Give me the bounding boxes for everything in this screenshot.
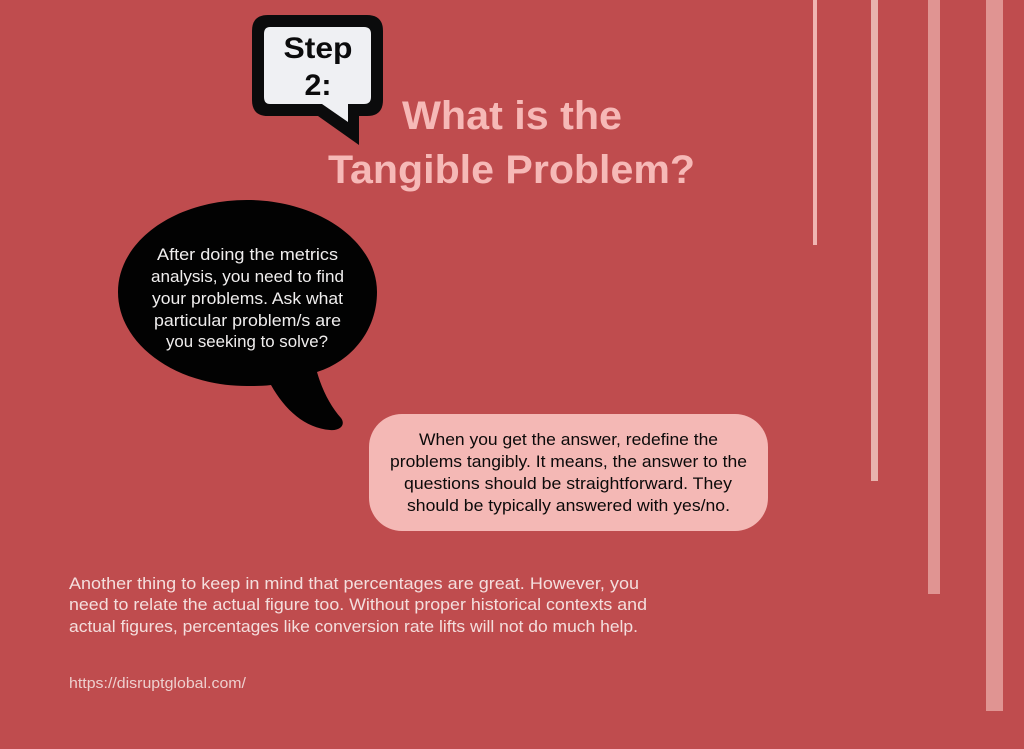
step label: Step <box>284 32 352 65</box>
bubble text: After doing the metrics <box>157 245 338 264</box>
icon: step speech bubble <box>252 15 383 145</box>
step label <box>284 32 352 102</box>
body paragraph: Another thing to keep in mind that percentages are great. However, you <box>69 574 639 593</box>
callout text: questions should be straightforward. They <box>404 474 733 493</box>
pink callout <box>369 414 768 531</box>
body paragraph <box>69 574 647 636</box>
body paragraph: actual figures, percentages like conversion rate lifts will not do much help. <box>69 617 638 636</box>
title: Tangible Problem? <box>328 148 695 192</box>
bubble text <box>151 245 344 351</box>
step label: 2: <box>304 69 332 102</box>
black speech bubble <box>118 200 377 430</box>
bubble text: your problems. Ask what <box>152 289 343 308</box>
callout text: should be typically answered with yes/no. <box>407 496 730 515</box>
bubble text: you seeking to solve? <box>166 332 328 351</box>
bubble text: particular problem/s are <box>154 311 341 330</box>
callout text: When you get the answer, redefine the <box>419 430 718 449</box>
body paragraph: need to relate the actual figure too. Without proper historical contexts and <box>69 595 647 614</box>
title: What is the <box>402 94 622 138</box>
callout text: problems tangibly. It means, the answer to the <box>390 452 747 471</box>
source url: https://disruptglobal.com/ <box>69 675 247 692</box>
decorative vertical bars <box>813 0 1003 711</box>
title <box>328 94 695 192</box>
bubble text: analysis, you need to find <box>151 267 344 286</box>
callout text <box>390 430 747 515</box>
